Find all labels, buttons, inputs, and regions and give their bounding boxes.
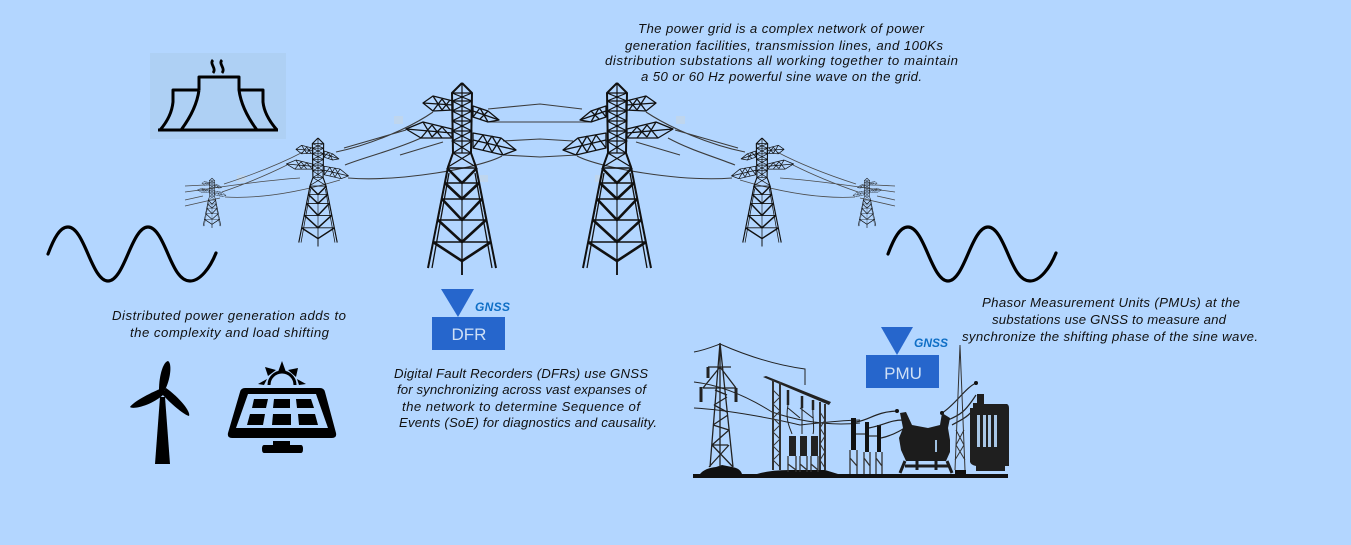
text: power grid description — [605, 21, 958, 84]
text: PMU description: substations use GNSS to measure and — [992, 312, 1227, 327]
text: PMU description: synchronize the shifting phase of the sine wave. — [962, 329, 1258, 344]
text: distributed generation: the complexity and load shifting — [130, 325, 330, 340]
tower: centre left — [406, 83, 516, 275]
icon: power plant — [150, 53, 286, 139]
icon: wind turbine — [130, 361, 189, 464]
transmission wires — [185, 104, 895, 206]
icon: DFR with GNSS antenna: DFR — [452, 325, 486, 344]
icon: solar panel — [228, 361, 336, 453]
tower: right — [731, 138, 794, 246]
icon: PMU with GNSS antenna — [866, 327, 948, 388]
text: DFR description: the network to determine Sequence of — [402, 399, 641, 414]
text: PMU description: Phasor Measurement Units (PMUs) at the — [982, 295, 1240, 310]
tower: far right — [853, 178, 882, 228]
tower: left — [286, 138, 349, 246]
faint watermark marks — [237, 116, 685, 182]
text: distributed generation — [112, 308, 346, 340]
text: power grid description: The power grid is a complex network of power — [638, 21, 925, 36]
substation illustration — [693, 343, 1009, 478]
icon: sine wave left — [48, 227, 216, 281]
text: power grid description: distribution substations all working together to maintain — [605, 53, 958, 68]
icon: DFR with GNSS antenna: GNSS — [475, 300, 510, 314]
text: distributed generation: Distributed power generation adds to — [112, 308, 346, 323]
icon: PMU with GNSS antenna: PMU — [884, 364, 922, 383]
text: DFR description: Events (SoE) for diagnostics and causality. — [399, 415, 657, 430]
text: DFR description: for synchronizing across vast expanses of — [397, 382, 647, 397]
text: DFR description — [394, 366, 657, 430]
tower: far left — [197, 178, 226, 228]
text: power grid description: a 50 or 60 Hz powerful sine wave on the grid. — [641, 69, 922, 84]
text: PMU description — [962, 295, 1258, 344]
icon: sine wave right — [888, 227, 1056, 281]
text: power grid description: generation facilities, transmission lines, and 100Ks — [625, 38, 943, 53]
icon: PMU with GNSS antenna: GNSS — [914, 336, 948, 350]
icon: DFR with GNSS antenna — [432, 289, 510, 350]
tower: centre right — [563, 83, 673, 275]
text: DFR description: Digital Fault Recorders (DFRs) use GNSS — [394, 366, 648, 381]
